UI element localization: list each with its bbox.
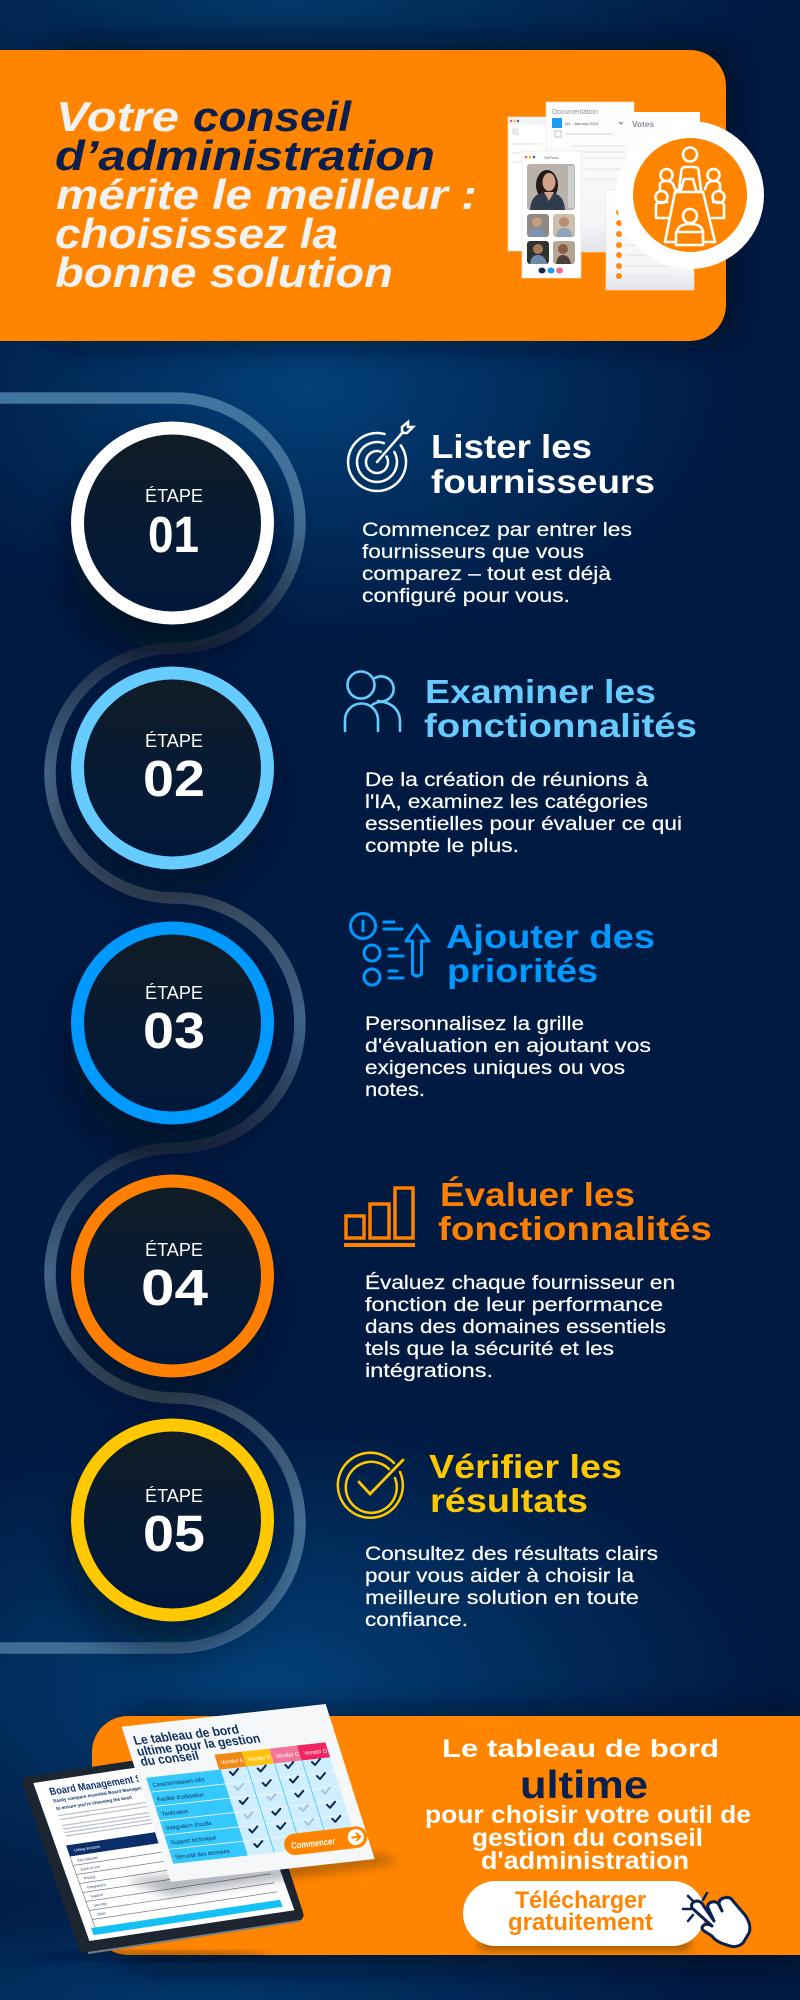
step 5 badge <box>78 1425 268 1615</box>
step 4 badge <box>78 1181 268 1371</box>
step 3 badge: ÉTAPE <box>145 983 203 1003</box>
banner headline <box>425 1735 751 1875</box>
banner headline: ultime <box>520 1764 648 1807</box>
banner headline: pour choisir votre outil de <box>425 1801 751 1829</box>
icon: boardroom meeting <box>616 121 764 269</box>
description: l'IA, examinez les catégories <box>365 792 648 813</box>
download button: gratuitement <box>508 1909 653 1936</box>
step 2 badge: ÉTAPE <box>145 731 203 751</box>
description: configuré pour vous. <box>362 586 570 607</box>
scorecard sheet: Tarification <box>161 1809 190 1818</box>
step 3 badge: 03 <box>143 1002 205 1059</box>
window: documentation: Q4 - January 2024 <box>565 121 599 126</box>
description <box>365 1273 675 1382</box>
scorecard sheet <box>122 1704 375 1882</box>
description: exigences uniques ou vos <box>365 1058 625 1079</box>
vendor headers: Vendor A <box>220 1758 245 1766</box>
button: Commencer: Commencer <box>291 1836 336 1851</box>
tablet mockup: Other <box>96 1911 107 1917</box>
icon: people <box>345 672 400 731</box>
title: bonne solution <box>55 249 393 296</box>
heading: Ajouter des priorités: priorités <box>447 952 598 989</box>
scorecard sheet: Facilité d'utilisation <box>156 1792 205 1803</box>
heading: Vérifier les résultats <box>429 1448 622 1519</box>
window: votes: Votes <box>632 120 655 129</box>
banner headline: d'administration <box>481 1847 689 1875</box>
software screenshots collage <box>508 102 700 290</box>
tablet mockup: Key features <box>77 1856 99 1863</box>
step 5 badge: ÉTAPE <box>145 1486 203 1506</box>
tablet mockup: Easily compare essential Board Management features <box>53 1781 170 1804</box>
description <box>362 520 632 607</box>
title: Votre <box>56 93 179 140</box>
window: documentation: Documentation <box>552 109 598 116</box>
step 3 badge <box>78 928 268 1118</box>
step 5 badge: 05 <box>143 1505 205 1562</box>
description: fournisseurs que vous <box>362 542 584 563</box>
tablet mockup: Ease of use <box>80 1865 101 1872</box>
step 2 badge: 02 <box>143 750 205 807</box>
description <box>365 1014 651 1101</box>
step 4 badge: 04 <box>141 1259 209 1316</box>
title: d’administration <box>55 132 435 179</box>
description: comparez – tout est déjà <box>362 564 612 585</box>
heading: Examiner les fonctionnalités <box>424 673 697 744</box>
download button: Télécharger <box>515 1887 646 1914</box>
window: video call: OnPoint <box>544 155 559 160</box>
heading: Ajouter des priorités <box>446 918 655 989</box>
title: choisissez la <box>55 210 338 257</box>
heading: Vérifier les résultats: résultats <box>430 1482 588 1519</box>
step 4 <box>78 1176 712 1382</box>
tablet mockup: Security <box>93 1902 107 1908</box>
vendor headers: Vendor C <box>275 1752 300 1760</box>
heading: Lister les fournisseurs: Lister les <box>431 428 592 465</box>
heading: Ajouter des priorités: Ajouter des <box>446 918 655 955</box>
step 1 badge: ÉTAPE <box>145 486 203 506</box>
button: Commencer <box>283 1825 368 1856</box>
scorecard sheet: Sécurité des données <box>175 1849 231 1861</box>
scorecard sheet: Le tableau de bord <box>131 1722 241 1748</box>
window: navigation <box>508 117 558 251</box>
heading: Évaluer les fonctionnalités <box>438 1176 712 1247</box>
scorecard sheet: Caractéristiques clés <box>152 1777 206 1789</box>
description: intégrations. <box>365 1361 493 1382</box>
step 2 badge <box>78 673 268 863</box>
serpentine connector path <box>0 398 300 1648</box>
step 1 badge: 01 <box>148 506 199 563</box>
description: d'évaluation en ajoutant vos <box>365 1036 651 1057</box>
step 1 <box>78 422 655 618</box>
description <box>365 770 682 857</box>
download button <box>463 1881 705 1950</box>
vendor headers: Vendor B <box>247 1755 272 1763</box>
scorecard sheet: ultime pour la gestion <box>135 1731 262 1759</box>
description: Évaluez chaque fournisseur en <box>365 1273 675 1294</box>
description: compte le plus. <box>365 836 519 857</box>
icon: priorities list with arrow <box>350 914 429 985</box>
description <box>365 1544 658 1631</box>
tablet mockup: Listing Vendors <box>73 1844 101 1853</box>
description: meilleure solution en toute <box>365 1588 639 1609</box>
heading: Examiner les fonctionnalités: fonctionnalités <box>424 707 697 744</box>
tablet mockup: Pricing <box>83 1875 96 1881</box>
tablet mockup: Board Management S <box>48 1774 144 1798</box>
description: Personnalisez la grille <box>365 1014 584 1035</box>
heading: Lister les fournisseurs: fournisseurs <box>431 463 655 500</box>
heading: Évaluer les fonctionnalités: fonctionnalités <box>438 1210 712 1247</box>
scorecard sheet: Support technique <box>170 1835 217 1846</box>
vendor headers: Vendor D <box>303 1749 328 1757</box>
window: votes <box>606 112 700 290</box>
description: notes. <box>365 1080 425 1101</box>
description: Consultez des résultats clairs <box>365 1544 658 1565</box>
description: essentielles pour évaluer ce qui <box>365 814 682 835</box>
heading: Vérifier les résultats: Vérifier les <box>429 1448 622 1485</box>
title: conseil <box>193 93 352 140</box>
window: documentation <box>546 102 634 252</box>
step 4 badge: ÉTAPE <box>145 1240 203 1260</box>
step 1 badge <box>78 428 268 618</box>
icon: bar chart <box>344 1188 415 1245</box>
step 3 <box>78 914 655 1118</box>
heading: Examiner les fonctionnalités: Examiner les <box>425 673 656 710</box>
title: mérite le meilleur : <box>56 171 477 218</box>
tablet mockup <box>28 1750 300 1953</box>
description: fonction de leur performance <box>365 1295 663 1316</box>
description: confiance. <box>365 1610 468 1631</box>
heading: Lister les fournisseurs <box>431 428 655 500</box>
step 5 <box>78 1425 658 1631</box>
heading: Évaluer les fonctionnalités: Évaluer les <box>440 1176 635 1213</box>
description: De la création de réunions à <box>365 770 649 791</box>
icon: pointing hand <box>683 1893 750 1947</box>
icon: target <box>348 422 413 491</box>
tablet mockup: Support <box>90 1893 104 1899</box>
banner headline: Le tableau de bord <box>442 1735 719 1763</box>
icon: check circle <box>338 1453 403 1518</box>
scorecard sheet: du conseil <box>138 1748 201 1769</box>
description: Commencez par entrer les <box>362 520 632 541</box>
tablet mockup: Integrations <box>87 1883 107 1890</box>
check marks <box>230 1759 340 1847</box>
window: video call <box>522 151 581 278</box>
tablet mockup: to ensure you're choosing the best! <box>55 1795 133 1811</box>
description: dans des domaines essentiels <box>365 1317 666 1338</box>
header panel <box>0 50 764 341</box>
step 2 <box>78 672 697 863</box>
scorecard sheet: Intégration d'outils <box>165 1821 213 1832</box>
call-to-action banner <box>28 1704 800 1960</box>
banner headline: gestion du conseil <box>472 1824 703 1852</box>
description: pour vous aider à choisir la <box>365 1566 634 1587</box>
vendor headers <box>214 1742 330 1770</box>
title <box>55 93 477 296</box>
description: tels que la sécurité et les <box>365 1339 614 1360</box>
